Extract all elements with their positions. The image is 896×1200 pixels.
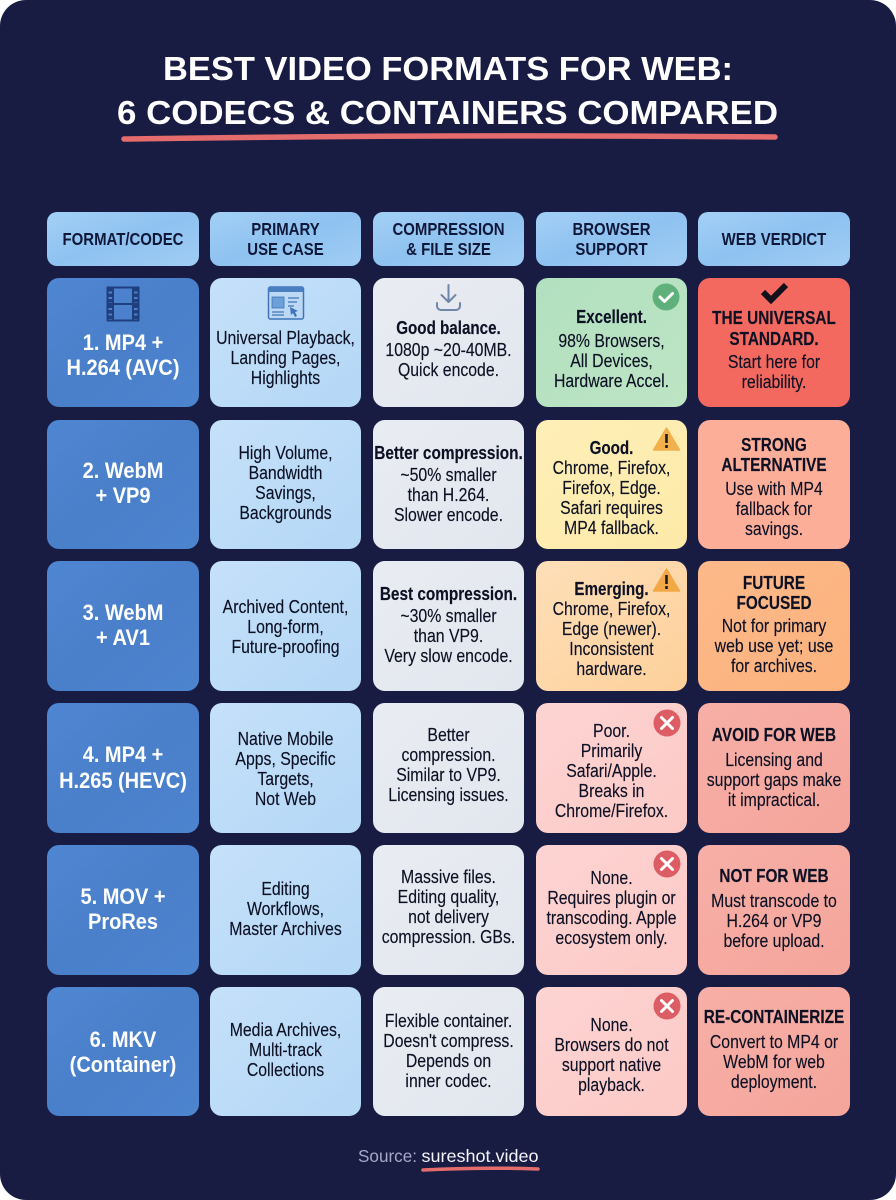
title: BEST VIDEO FORMATS FOR WEB: [163,51,733,88]
browser support cell: Chrome, Firefox, [553,457,670,478]
header: format/codec [47,212,199,266]
verdict cell [698,703,850,833]
format cell: ProRes [88,910,158,934]
row 4: MP4 + H.265 [47,703,850,833]
use case cell: Multi-track [249,1039,322,1060]
use case cell: Backgrounds [239,502,332,523]
verdict cell [698,420,850,549]
format cell: 6. MKV [90,1028,156,1052]
title underline [124,136,775,139]
source line: Source: [358,1146,417,1166]
browser support cell [536,987,687,1116]
use case cell: Targets, [257,768,314,789]
verdict cell: reliability. [742,371,806,392]
use case cell: Master Archives [229,918,342,939]
verdict cell: Start here for [728,351,820,372]
format cell [47,561,199,691]
use case cell: Archived Content, [223,596,348,617]
icon: film strip [108,287,138,321]
icon: download [437,285,460,310]
verdict cell [698,561,850,691]
verdict cell: web use yet; use [714,635,833,656]
use case cell [210,278,361,407]
use case cell: Universal Playback, [216,327,355,348]
format cell: 5. MOV + [80,885,166,909]
verdict cell: RE-CONTAINERIZE [704,1007,844,1027]
compression cell: Similar to VP9. [396,764,501,785]
browser support cell: Chrome, Firefox, [553,598,670,619]
use case cell: Media Archives, [230,1019,341,1040]
row 1: MP4 + H.264 [47,278,850,407]
title: 6 CODECS & CONTAINERS COMPARED [117,95,778,132]
source line [358,1146,538,1166]
compression cell [373,561,524,691]
compression cell: ~50% smaller [400,464,497,485]
title [117,51,778,132]
header: primary use case [210,212,361,266]
icon: green check [652,284,680,310]
row 2: WebM + VP9 [47,420,850,549]
icon: red cross [654,992,680,1020]
compression cell: Depends on [406,1050,491,1071]
compression cell: Good balance. [396,318,501,338]
browser support cell: None. [590,867,633,888]
format cell: H.264 (AVC) [66,356,180,380]
use case cell: High Volume, [238,442,333,463]
compression cell [373,420,524,549]
compression cell: Flexible container. [385,1010,512,1031]
format cell [47,845,199,975]
row 3: WebM + AV1 [47,561,850,691]
browser support cell: Firefox, Edge. [562,477,661,498]
verdict cell: Licensing and [725,749,823,770]
browser support cell: 98% Browsers, [558,330,665,351]
browser support cell: Emerging. [574,579,649,599]
browser support cell: Chrome/Firefox. [555,800,668,821]
compression cell: ~30% smaller [400,605,497,626]
browser support cell [536,703,687,833]
browser support cell: Requires plugin or [547,887,676,908]
header: primary use case: PRIMARY [251,220,320,239]
header: browser support [536,212,687,266]
use case cell [210,703,361,833]
browser support cell: None. [590,1014,633,1035]
use case cell [210,845,361,975]
use case cell: Workflows, [247,898,324,919]
header: compression and file size [373,212,524,266]
verdict cell: STANDARD. [729,329,819,349]
format cell: 2. WebM [83,459,163,483]
browser support cell: playback. [578,1074,645,1095]
compression cell: 1080p ~20-40MB. [385,339,512,360]
verdict cell: fallback for [736,498,812,519]
header: compression and file size: COMPRESSION [392,220,505,239]
header: browser support: SUPPORT [575,240,648,259]
browser support cell: transcoding. Apple [546,907,677,928]
use case cell: Long-form, [247,616,324,637]
icon: warning [654,428,680,450]
compression cell [373,845,524,975]
verdict cell [698,845,850,975]
browser support cell: MP4 fallback. [564,517,659,538]
browser support cell: Safari requires [560,497,663,518]
verdict cell: STRONG [741,435,807,455]
compression cell: than VP9. [414,625,483,646]
verdict cell: Must transcode to [711,890,837,911]
use case cell: Collections [247,1059,324,1080]
browser support cell: Breaks in [579,780,644,801]
verdict cell: H.264 or VP9 [727,910,821,931]
use case cell: Highlights [251,367,320,388]
use case cell: Landing Pages, [231,347,340,368]
use case cell: Apps, Specific [235,748,336,769]
use case cell: Not Web [255,788,316,809]
compression cell: Quick encode. [398,359,499,380]
format cell: 1. MP4 + [83,331,163,355]
compression cell: inner codec. [405,1070,492,1091]
compression cell: not delivery [408,906,489,927]
use case cell [210,420,361,549]
verdict cell: support gaps make [707,769,841,790]
browser support cell: All Devices, [570,350,653,371]
format cell [47,703,199,833]
verdict cell: THE UNIVERSAL [712,308,836,328]
format cell [47,420,199,549]
verdict cell: for archives. [731,655,817,676]
format cell [47,987,199,1116]
browser support cell: support native [562,1054,661,1075]
browser support cell: Edge (newer). [562,618,661,639]
verdict cell: it impractical. [728,789,820,810]
verdict cell: Not for primary [722,615,827,636]
table header [47,212,850,266]
browser support cell: Safari/Apple. [566,760,657,781]
icon: browser window [268,287,304,319]
browser support cell [536,561,687,691]
compression cell: Very slow encode. [384,645,513,666]
compression cell: Editing quality, [398,886,499,907]
compression cell: Doesn't compress. [383,1030,514,1051]
verdict cell: FOCUSED [736,593,812,613]
use case cell: Savings, [255,482,316,503]
browser support cell: Excellent. [576,307,647,327]
format cell: H.265 (HEVC) [59,769,187,793]
compression cell [373,703,524,833]
source line: sureshot.video [422,1146,538,1166]
compression cell: Better compression. [374,443,523,463]
compression cell: Massive files. [401,866,496,887]
use case cell: Bandwidth [249,462,322,483]
browser support cell [536,845,687,975]
header: web verdict [698,212,850,266]
verdict cell: before upload. [723,930,825,951]
use case cell: Future-proofing [231,636,340,657]
browser support cell: Browsers do not [554,1034,669,1055]
verdict cell: savings. [745,518,803,539]
verdict cell: Convert to MP4 or [710,1031,838,1052]
verdict cell: deployment. [731,1071,817,1092]
compression cell: Better [427,724,470,745]
verdict cell: WebM for web [723,1051,825,1072]
use case cell [210,987,361,1116]
browser support cell: Poor. [593,720,630,741]
use case cell [210,561,361,691]
browser support cell: Good. [590,438,633,458]
browser support cell: Inconsistent [569,638,654,659]
verdict cell: NOT FOR WEB [719,866,829,886]
compression cell [373,987,524,1116]
row 6: MKV [47,987,850,1116]
compression cell: compression. [401,744,496,765]
source underline [423,1168,538,1170]
verdict cell [698,987,850,1116]
verdict cell [698,278,850,407]
compression cell [373,278,524,407]
header: browser support: BROWSER [572,220,651,239]
verdict cell: FUTURE [743,573,805,593]
compression cell: Slower encode. [394,504,503,525]
format cell: + AV1 [96,626,150,650]
browser support cell [536,420,687,549]
verdict cell: AVOID FOR WEB [712,725,836,745]
format cell: (Container) [70,1053,176,1077]
compression cell: Licensing issues. [388,784,509,805]
format cell: + VP9 [95,484,151,508]
icon: red cross [654,710,680,736]
header: primary use case: USE CASE [247,240,324,259]
compression cell: than H.264. [408,484,489,505]
icon: black check [763,285,786,300]
icon: red cross [654,850,680,878]
browser support cell: ecosystem only. [555,927,668,948]
format cell: 3. WebM [83,601,163,625]
format cell [47,278,199,407]
use case cell: Editing [261,878,310,899]
header: web verdict: WEB VERDICT [722,230,826,249]
use case cell: Native Mobile [238,728,333,749]
icon: warning [654,569,680,591]
format cell: 4. MP4 + [83,743,163,767]
compression cell: Best compression. [380,584,517,604]
browser support cell: Hardware Accel. [554,370,669,391]
header: compression and file size: & FILE SIZE [406,240,491,259]
browser support cell [536,278,687,407]
header: format/codec: FORMAT/CODEC [63,230,184,249]
verdict cell: Use with MP4 [725,478,823,499]
row 5: MOV + ProRes [47,845,850,975]
compression cell: compression. GBs. [382,926,515,947]
verdict cell: ALTERNATIVE [721,455,827,475]
browser support cell: hardware. [576,658,647,679]
browser support cell: Primarily [581,740,643,761]
